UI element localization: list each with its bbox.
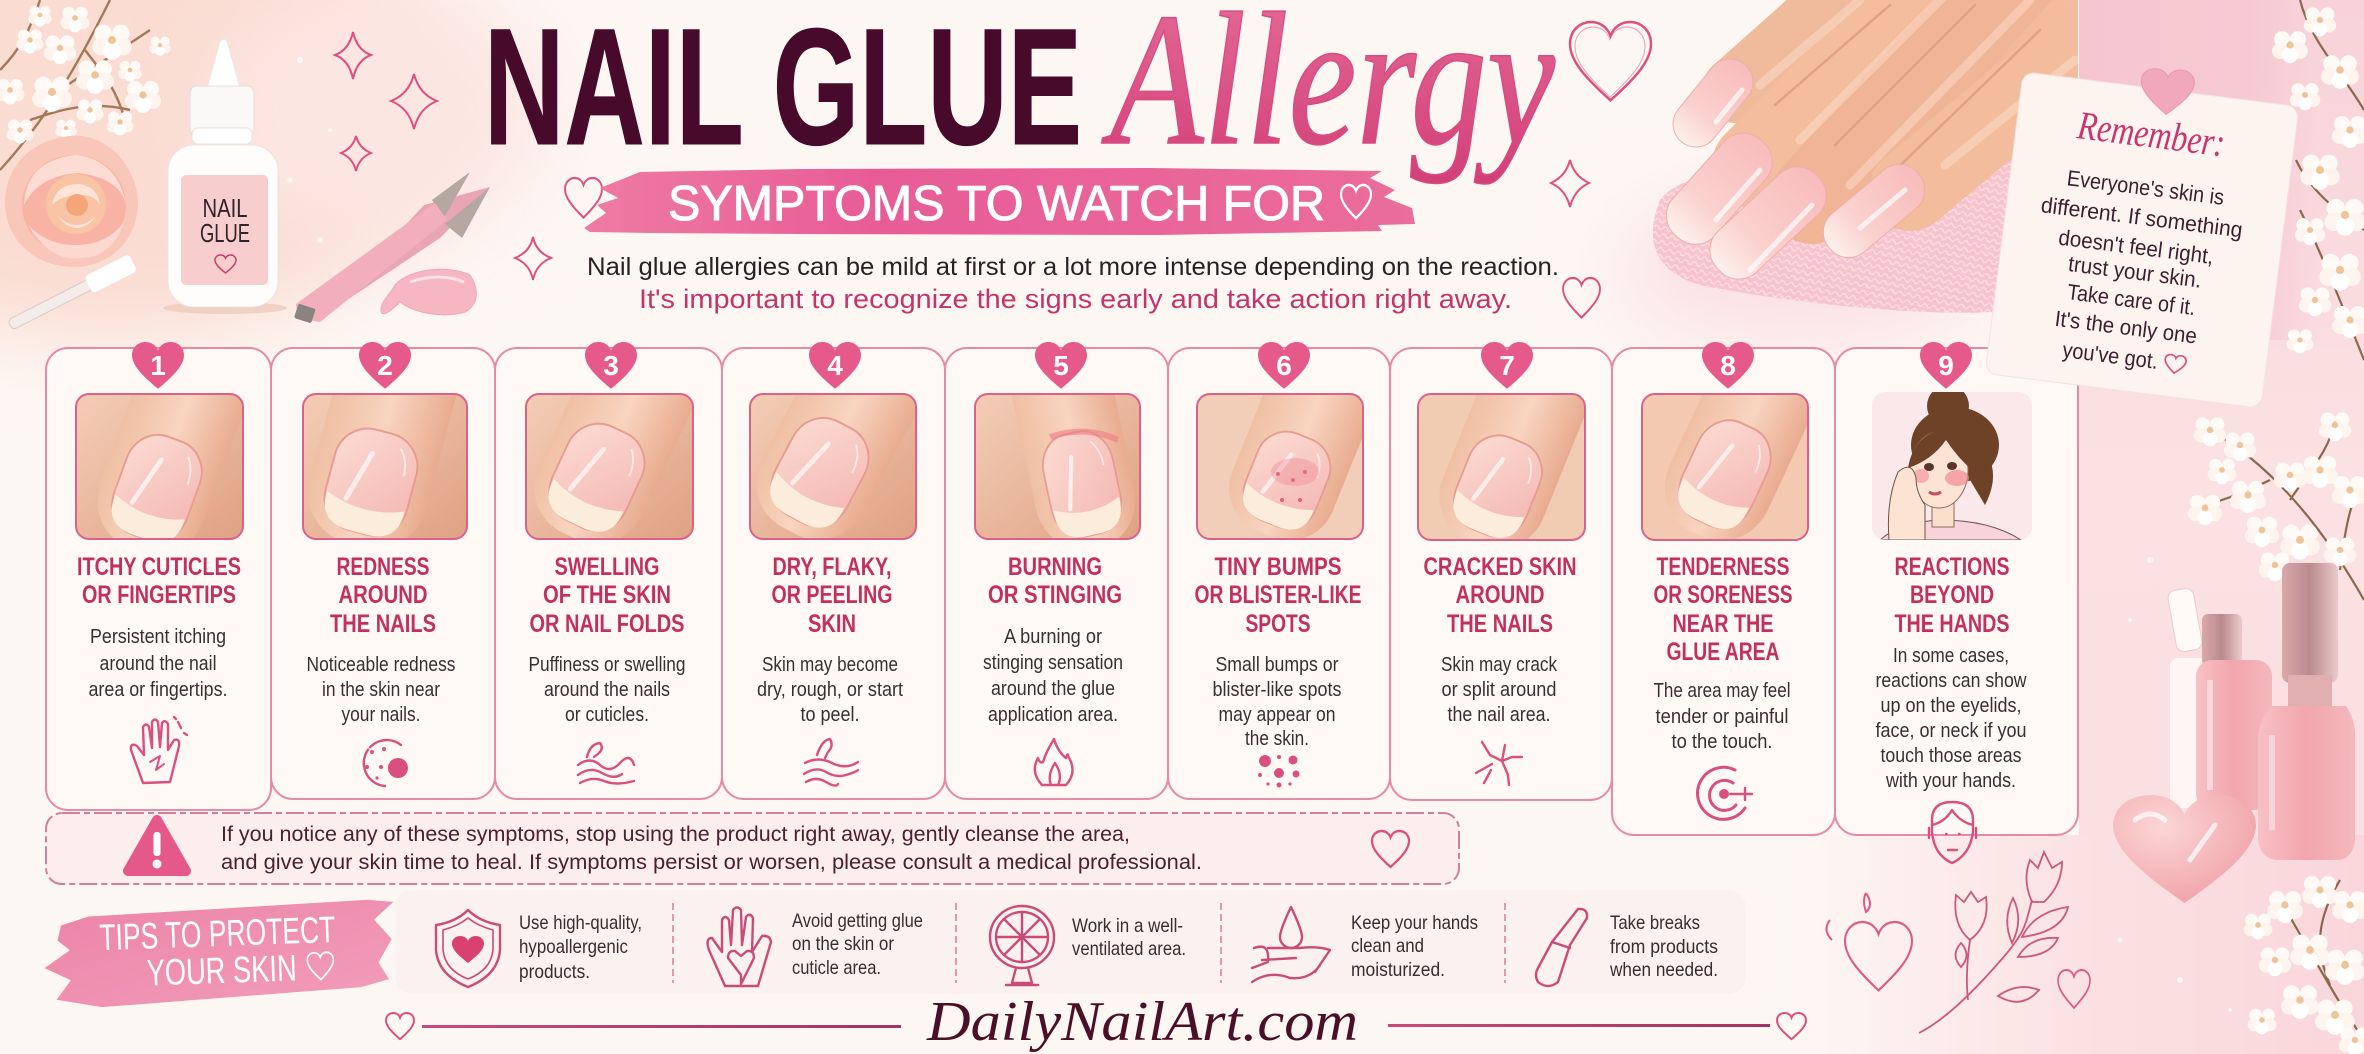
right decoration: flowers [2272, 0, 2364, 360]
illustration: woman touching her face [1872, 385, 2032, 540]
card 7: cracked skin: AROUND [1456, 581, 1544, 609]
card 3: swelling: OF THE SKIN [543, 581, 671, 609]
card 6: tiny bumps: SPOTS [1246, 610, 1310, 638]
sparkles and hearts around the title [335, 22, 1651, 318]
tip 1: hypoallergenic: products. [519, 961, 590, 983]
large polish bottle [2258, 563, 2355, 860]
card 2: redness: your nails. [342, 704, 420, 726]
card 7: cracked skin: THE NAILS [1447, 610, 1553, 638]
card 8: tenderness: The area may feel [1654, 680, 1790, 702]
card 9: reactions beyond hands: In some cases, [1893, 645, 2009, 667]
card 4: dry flaky: DRY, FLAKY, [772, 553, 892, 581]
tip 3: ventilated area [990, 906, 1186, 985]
tips panel [395, 890, 1746, 994]
card 9: reactions beyond hands: with your hands. [1885, 770, 2016, 792]
tip 5: take breaks [1536, 909, 1718, 986]
icon: nail file [1536, 909, 1587, 986]
card 4: dry flaky: OR PEELING [772, 581, 892, 609]
icon: face [1929, 802, 1976, 863]
tip 4: clean hands: clean and [1351, 935, 1424, 957]
bottom right flowers [2244, 876, 2364, 1054]
footer website [386, 991, 1806, 1053]
tip 1: hypoallergenic [436, 910, 642, 987]
intro text [587, 253, 1559, 314]
card 6: tiny bumps: OR BLISTER-LIKE [1194, 581, 1362, 609]
card 9: reactions beyond hands: touch those areas [1880, 745, 2022, 767]
card 4: dry flaky: Skin may become [762, 654, 898, 676]
card 2: redness: Noticeable redness [306, 654, 456, 676]
card 3: swelling: around the nails [544, 679, 670, 701]
heart pin [2140, 68, 2195, 116]
tips brush heading [42, 899, 397, 1009]
mid right flowers [2188, 412, 2364, 600]
subtitle banner [584, 168, 1415, 235]
glue bottle: NAIL [202, 193, 248, 223]
card 1: itchy cuticles: OR FINGERTIPS [82, 581, 236, 609]
tweezers [294, 172, 490, 323]
remember note [1985, 72, 2299, 408]
card 6: tiny bumps [1168, 342, 1390, 800]
card 8: tenderness [1611, 342, 1835, 836]
caution bar: and give your skin time to heal. If symptoms persist or worsen, please consult a medical professional. [221, 850, 1202, 874]
card 9: reactions beyond hands: BEYOND [1910, 581, 1994, 609]
icon: cracks [1476, 742, 1522, 785]
card 8: tenderness: OR SORENESS [1654, 581, 1792, 609]
card 8: tenderness: GLUE AREA [1666, 638, 1780, 666]
card 3: swelling: 3 [603, 350, 619, 381]
icon: warning triangle [128, 820, 186, 871]
remember note: you've got. [2061, 337, 2159, 374]
tip 1: hypoallergenic: hypoallergenic [519, 936, 628, 958]
card 5: burning: OR STINGING [988, 581, 1122, 609]
card 8: tenderness: to the touch. [1672, 731, 1772, 753]
line-art floral branch [1919, 852, 2068, 1033]
card 8: tenderness: TENDERNESS [1656, 553, 1790, 581]
card 3: swelling [495, 342, 722, 800]
tip 1: hypoallergenic: Use high-quality, [519, 912, 642, 934]
card 8: tenderness: NEAR THE [1672, 610, 1774, 638]
card 4: dry flaky: 4 [827, 350, 843, 381]
left decoration: baby's breath flowers [0, 0, 171, 170]
tip 2: avoid glue on skin: cuticle area. [792, 957, 881, 979]
card 5: burning: stinging sensation [983, 652, 1123, 674]
tip 2: avoid glue on skin: on the skin or [792, 933, 894, 955]
remember note: doesn't feel right, [2057, 225, 2215, 269]
card 1: itchy cuticles: Persistent itching [90, 626, 226, 648]
card 5: burning: A burning or [1004, 626, 1102, 648]
tip 2: avoid glue on skin: Avoid getting glue [792, 910, 923, 932]
nail tip cap [381, 269, 476, 315]
card 9: reactions beyond hands: face, or neck if you [1876, 720, 2026, 742]
rose [5, 136, 138, 267]
pink heart ornament [2113, 795, 2256, 903]
tip 3: ventilated area: ventilated area. [1072, 938, 1186, 960]
tip 4: clean hands: Keep your hands [1351, 912, 1478, 934]
caution bar [46, 813, 1459, 884]
footer website: DailyNailArt.com [926, 991, 1358, 1053]
tip 5: take breaks: Take breaks [1610, 912, 1700, 934]
card 2: redness: REDNESS [336, 553, 430, 581]
symptom cards [45, 342, 2079, 864]
card 5: burning: around the glue [991, 678, 1115, 700]
remember note: Everyone's skin is [2066, 165, 2226, 210]
tips brush heading: YOUR SKIN [146, 947, 297, 994]
card 3: swelling: SWELLING [554, 553, 660, 581]
card 4: dry flaky: dry, rough, or start [757, 679, 903, 701]
card 5: burning: application area. [988, 704, 1118, 726]
card 8: tenderness: 8 [1720, 350, 1736, 381]
small polish bottle [2167, 587, 2272, 810]
title: NAIL GLUE [484, 0, 1082, 180]
card 6: tiny bumps: may appear on [1218, 704, 1336, 726]
card 1: itchy cuticles: 1 [150, 350, 166, 381]
card 9: reactions beyond hands: reactions can show [1876, 670, 2027, 692]
card 2: redness: AROUND [338, 581, 428, 609]
card 6: tiny bumps: Small bumps or [1216, 654, 1339, 676]
card 7: cracked skin: or split around [1442, 679, 1556, 701]
card 1: itchy cuticles [45, 342, 272, 811]
intro text: Nail glue allergies can be mild at first or a lot more intense depending on the reaction. [587, 253, 1559, 281]
card 3: swelling: or cuticles. [565, 704, 649, 726]
tip 5: take breaks: when needed. [1609, 959, 1718, 981]
card 2: redness [271, 342, 495, 800]
icon: bumps [1258, 755, 1300, 788]
card 7: cracked skin: the nail area. [1448, 704, 1550, 726]
glue applicator [6, 254, 137, 334]
remember note: It's the only one [2053, 306, 2198, 349]
card 4: dry flaky: to peel. [800, 704, 860, 726]
icon: drop and hand [1252, 907, 1330, 982]
tip 5: take breaks: from products [1610, 936, 1718, 958]
card 1: itchy cuticles: area or fingertips. [88, 679, 228, 701]
card 9: reactions beyond hands [1835, 342, 2078, 863]
tip 3: ventilated area: Work in a well- [1072, 915, 1183, 937]
tip 4: clean hands: moisturized. [1351, 959, 1445, 981]
card 3: swelling: Puffiness or swelling [528, 654, 686, 676]
card 9: reactions beyond hands: THE HANDS [1894, 610, 2010, 638]
tip 4: clean hands [1252, 907, 1478, 982]
card 6: tiny bumps: the skin. [1245, 728, 1309, 750]
card 1: itchy cuticles: around the nail [100, 653, 216, 675]
card 6: tiny bumps: TINY BUMPS [1214, 553, 1342, 581]
card 9: reactions beyond hands: up on the eyelids, [1880, 695, 2022, 717]
tip 2: avoid glue on skin [708, 908, 923, 986]
card 4: dry flaky: SKIN [808, 610, 856, 638]
card 5: burning: 5 [1053, 350, 1069, 381]
icon: flame [1035, 739, 1073, 785]
intro text: It's important to recognize the signs early and take action right away. [639, 284, 1512, 314]
card 5: burning: BURNING [1008, 553, 1102, 581]
card 5: burning [945, 342, 1168, 800]
icon: red patch [364, 740, 408, 786]
card 2: redness: in the skin near [322, 679, 440, 701]
remember note: Take care of it. [2066, 279, 2197, 320]
icon: fan [990, 906, 1054, 985]
glue bottle [163, 39, 287, 314]
card 6: tiny bumps: 6 [1276, 350, 1292, 381]
caution bar: If you notice any of these symptoms, stop using the product right away, gently cleanse the area, [221, 822, 1130, 846]
tips brush heading: TIPS TO PROTECT [99, 909, 336, 958]
card 7: cracked skin [1390, 342, 1612, 801]
remember note: trust your skin. [2067, 251, 2203, 293]
card 2: redness: THE NAILS [330, 610, 436, 638]
remember note: different. If something [2040, 192, 2244, 242]
card 9: reactions beyond hands: REACTIONS [1894, 553, 2010, 581]
icon: shield with heart [436, 910, 500, 987]
line-art hearts [1826, 893, 2090, 1008]
card 7: cracked skin: 7 [1499, 350, 1515, 381]
subtitle banner: SYMPTOMS TO WATCH FOR [668, 177, 1325, 231]
remember note: Remember: [2074, 102, 2228, 165]
icon: peeling skin [804, 739, 858, 786]
card 9: reactions beyond hands: 9 [1938, 350, 1954, 381]
icon: swelling waves [578, 743, 634, 784]
card 6: tiny bumps: blister-like spots [1212, 679, 1342, 701]
card 8: tenderness: tender or painful [1656, 706, 1788, 728]
card 4: dry flaky [722, 342, 945, 800]
card 1: itchy cuticles: ITCHY CUTICLES [77, 553, 241, 581]
icon: hand with heart [708, 908, 771, 986]
card 2: redness: 2 [377, 350, 393, 381]
card 7: cracked skin: Skin may crack [1441, 654, 1558, 676]
card 7: cracked skin: CRACKED SKIN [1424, 553, 1576, 581]
glue bottle: GLUE [200, 218, 250, 248]
icon: itchy hand [131, 717, 187, 783]
icon: target [1698, 767, 1752, 819]
hand photo with towel [1653, 0, 2090, 320]
card 3: swelling: OR NAIL FOLDS [530, 610, 684, 638]
